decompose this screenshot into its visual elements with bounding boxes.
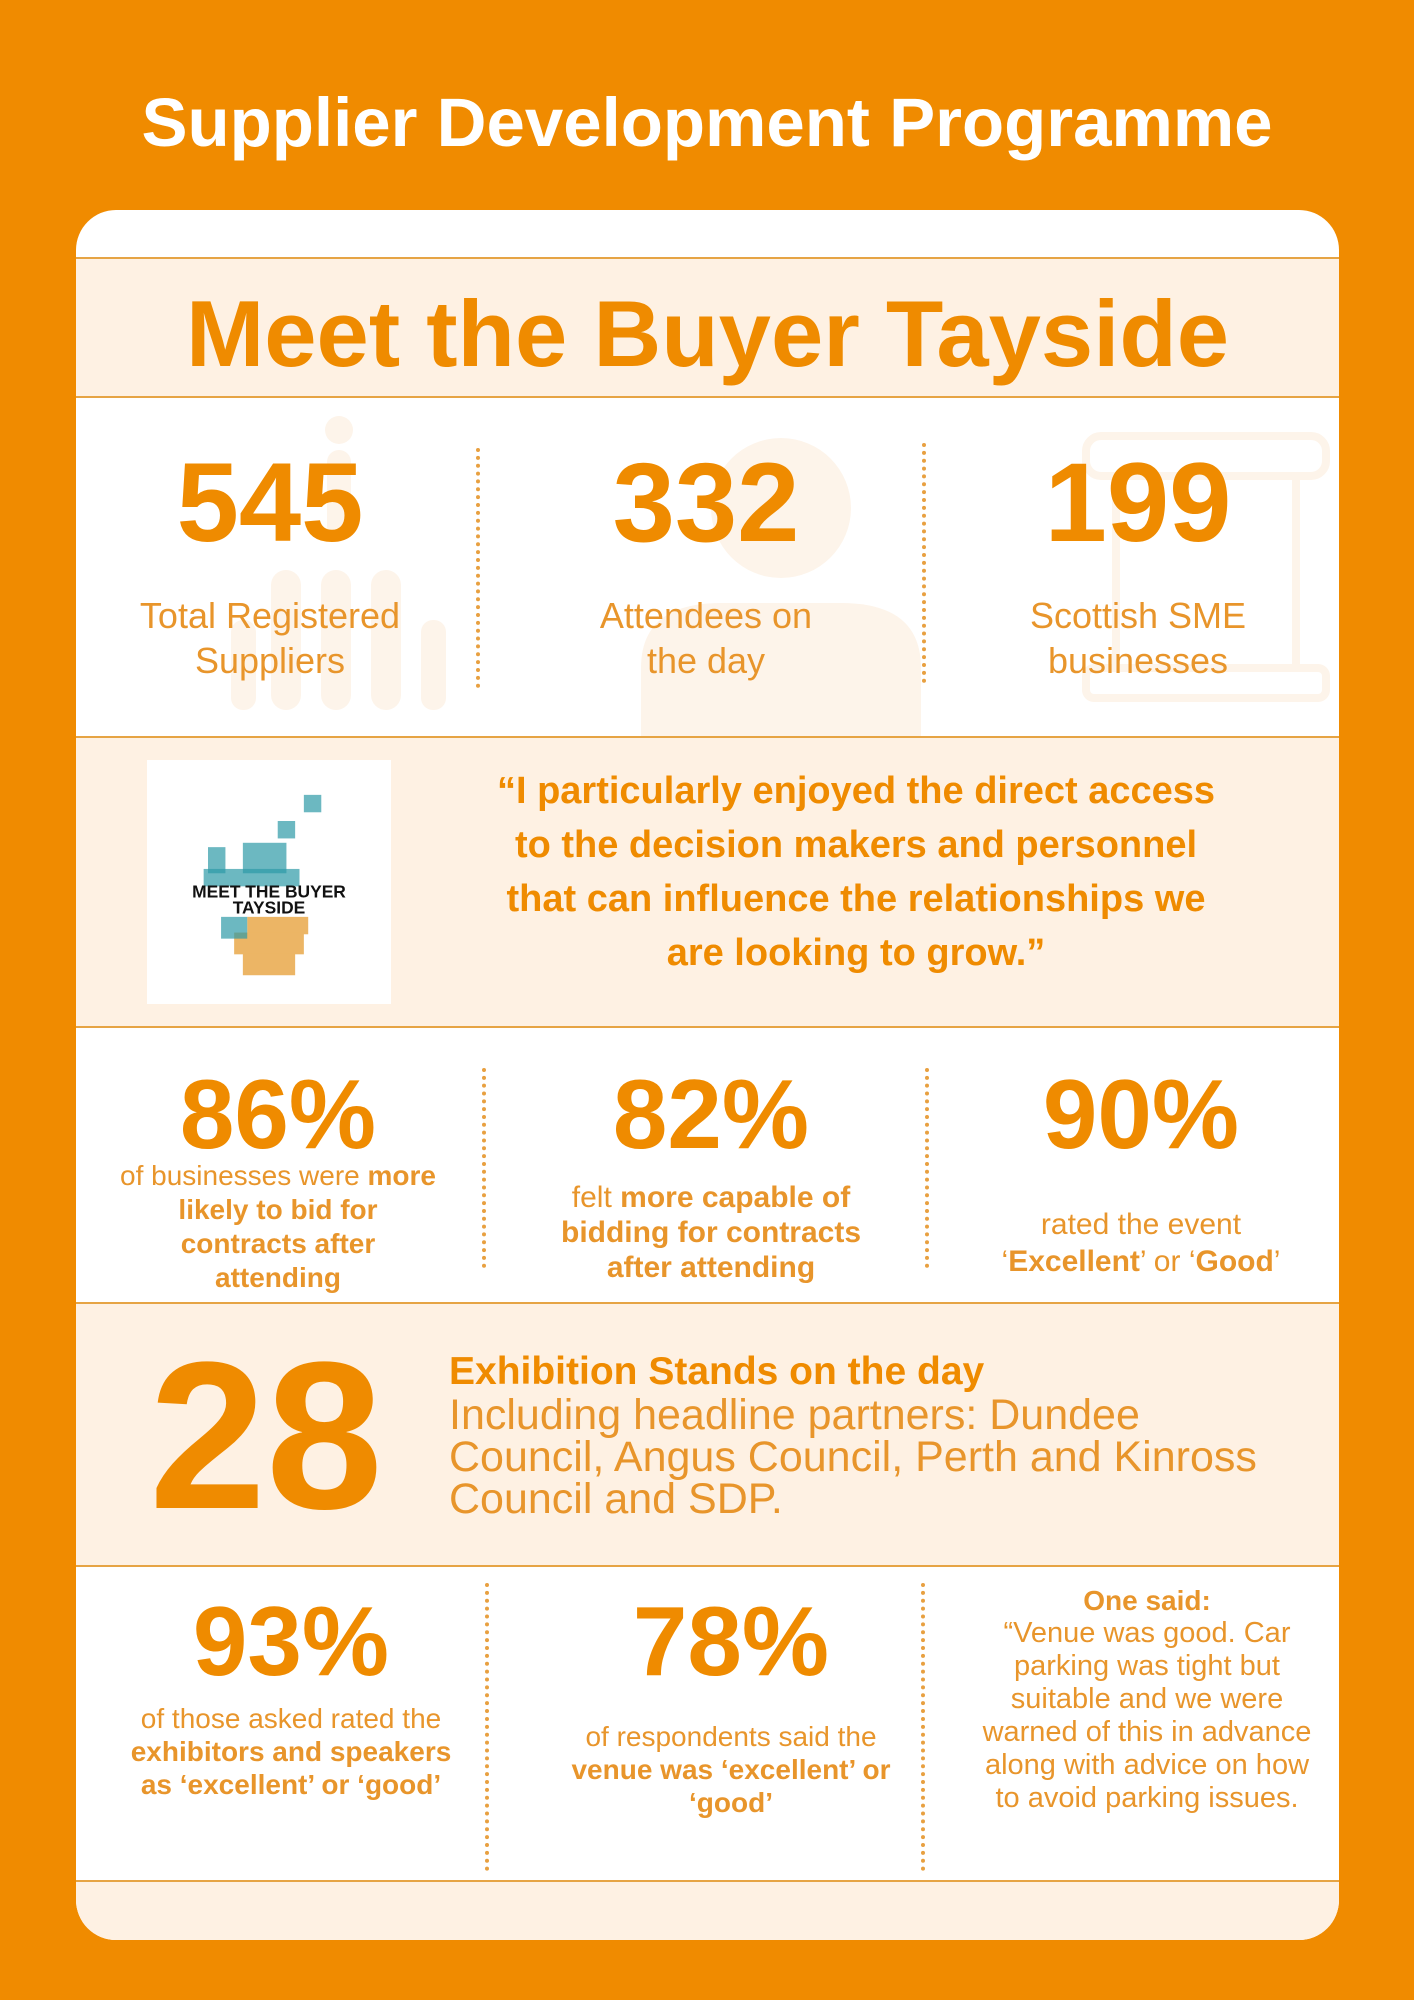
stat 82%: after attending (607, 1251, 815, 1284)
customer quote: along with advice on how (985, 1749, 1309, 1781)
stat 93%: of those asked rated the (141, 1703, 441, 1734)
stat 90%: 90% (1043, 1059, 1239, 1169)
stat 199: Scottish SME (1030, 595, 1246, 636)
stat 86%: of businesses were more (120, 1160, 436, 1191)
stat 93%: 93% (193, 1586, 389, 1696)
customer quote: suitable and we were (1011, 1683, 1283, 1715)
icon: column (1082, 432, 1330, 702)
stat 82%: 82% (613, 1059, 809, 1169)
quote band (76, 736, 1339, 1027)
stat 86%: attending (215, 1262, 341, 1293)
quote text: that can influence the relationships we (507, 878, 1205, 920)
icon: people (231, 416, 446, 710)
stat 199 (1030, 440, 1246, 681)
card (76, 210, 1339, 1940)
stat 86%: likely to bid for (178, 1194, 378, 1225)
stat 90%: ‘Excellent’ or ‘Good’ (1002, 1245, 1280, 1278)
exhibition text (449, 1350, 1257, 1523)
customer quote: parking was tight but (1014, 1650, 1280, 1682)
quote text: are looking to grow.” (667, 932, 1045, 974)
stat 199: 199 (1045, 440, 1231, 565)
stat 78% (571, 1586, 891, 1818)
stat 78%: 78% (633, 1586, 829, 1696)
stat 545: Total Registered (140, 595, 400, 636)
big 28: 28 (149, 1318, 383, 1553)
stat 93%: as ‘excellent’ or ‘good’ (141, 1769, 441, 1800)
customer quote: to avoid parking issues. (995, 1782, 1299, 1814)
exhibition band (76, 1302, 1339, 1566)
exhibition text: Council and SDP. (449, 1475, 783, 1523)
logo: MEET THE BUYER (192, 882, 346, 902)
stat 332 (600, 440, 812, 681)
stat 332: Attendees on (600, 595, 812, 636)
stat 90%: rated the event (1041, 1208, 1241, 1241)
quote text: to the decision makers and personnel (515, 824, 1197, 866)
bottom row (76, 1565, 1339, 1882)
stat 82%: bidding for contracts (561, 1216, 861, 1249)
stat 82%: felt more capable of (572, 1181, 850, 1214)
stat 86%: 86% (180, 1059, 376, 1169)
heading band (76, 257, 1339, 398)
stat 545: 545 (177, 440, 363, 565)
stat 78%: of respondents said the (585, 1721, 877, 1752)
stat 90% (1002, 1059, 1280, 1278)
stat 332: 332 (613, 440, 799, 565)
logo: TAYSIDE (233, 897, 305, 917)
stat 78%: ‘good’ (689, 1787, 773, 1818)
customer quote (982, 1585, 1311, 1814)
exhibition text: Council, Angus Council, Perth and Kinross (449, 1433, 1257, 1481)
exhibition text: Exhibition Stands on the day (449, 1350, 984, 1393)
logo (147, 760, 391, 1004)
stat 545 (140, 440, 400, 681)
stats row (140, 416, 1330, 736)
stat 545: Suppliers (195, 640, 345, 681)
stat 93% (131, 1586, 451, 1800)
quote text: “I particularly enjoyed the direct access (497, 770, 1215, 812)
title: Supplier Development Programme (141, 84, 1273, 161)
percentages row (76, 1026, 1339, 1303)
heading: Meet the Buyer Tayside (186, 281, 1229, 386)
stat 199: businesses (1048, 640, 1228, 681)
stat 86% (120, 1059, 436, 1293)
stat 93%: exhibitors and speakers (131, 1736, 451, 1767)
customer quote: One said: (1083, 1585, 1211, 1616)
stat 78%: venue was ‘excellent’ or (571, 1754, 891, 1785)
stat 82% (561, 1059, 861, 1284)
customer quote: warned of this in advance (983, 1716, 1311, 1748)
quote text (497, 770, 1215, 974)
customer quote: “Venue was good. Car (1004, 1617, 1290, 1649)
icon: person circle (641, 438, 921, 736)
exhibition text: Including headline partners: Dundee (449, 1391, 1140, 1439)
stat 86%: contracts after (181, 1228, 375, 1259)
stat 332: the day (647, 640, 765, 681)
